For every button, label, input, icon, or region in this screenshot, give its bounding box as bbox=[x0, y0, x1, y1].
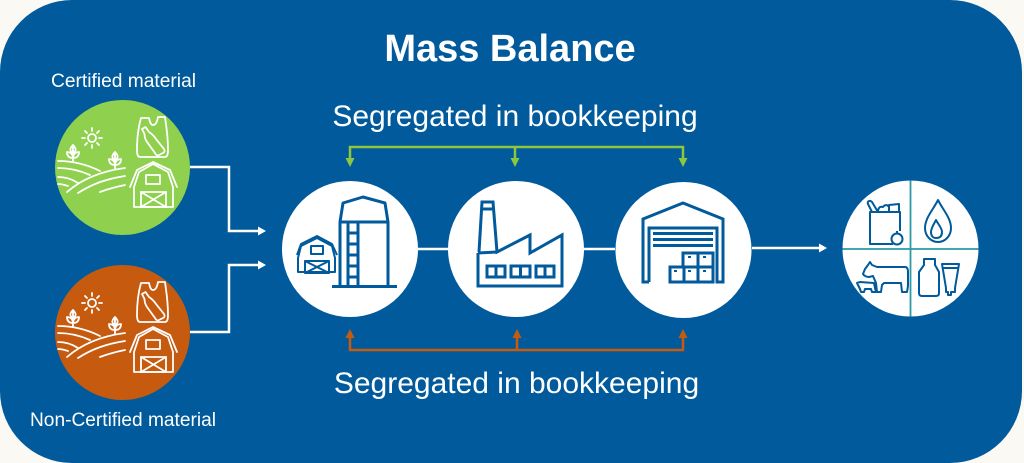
icon: water drop bbox=[925, 200, 951, 242]
quadrant dividers bbox=[842, 180, 978, 316]
process circle: farm and silo bbox=[282, 181, 418, 317]
icon: silo bbox=[332, 197, 397, 286]
bottom heading: segregated in bookkeeping: Segregated in bookkeeping bbox=[334, 367, 699, 400]
top heading: segregated in bookkeeping: Segregated in bookkeeping bbox=[332, 100, 698, 133]
connectors between process circles bbox=[418, 248, 615, 250]
arrow: certified to process bbox=[190, 167, 266, 236]
arrow: process to products bbox=[752, 244, 827, 252]
icon: certified material circle bbox=[55, 100, 190, 235]
icon: factory bbox=[478, 202, 562, 286]
process circle: factory bbox=[448, 181, 584, 317]
label: non-certified material: Non-Certified material bbox=[30, 410, 216, 431]
label: certified material: Certified material bbox=[51, 71, 196, 92]
icon: bottle and tube bbox=[919, 259, 959, 296]
icon: cow and calf bbox=[857, 262, 908, 292]
title: Mass Balance bbox=[384, 28, 636, 70]
process circle: warehouse bbox=[616, 182, 752, 318]
icon: non-certified material circle bbox=[55, 265, 190, 400]
orange bookkeeping bracket bbox=[346, 329, 688, 350]
icon: grocery bag bbox=[868, 201, 902, 244]
icon: small barn bbox=[297, 236, 337, 273]
icon: warehouse bbox=[643, 203, 723, 282]
green bookkeeping bracket bbox=[346, 147, 688, 167]
products circle bbox=[842, 180, 978, 316]
arrow: non-certified to process bbox=[190, 260, 266, 332]
